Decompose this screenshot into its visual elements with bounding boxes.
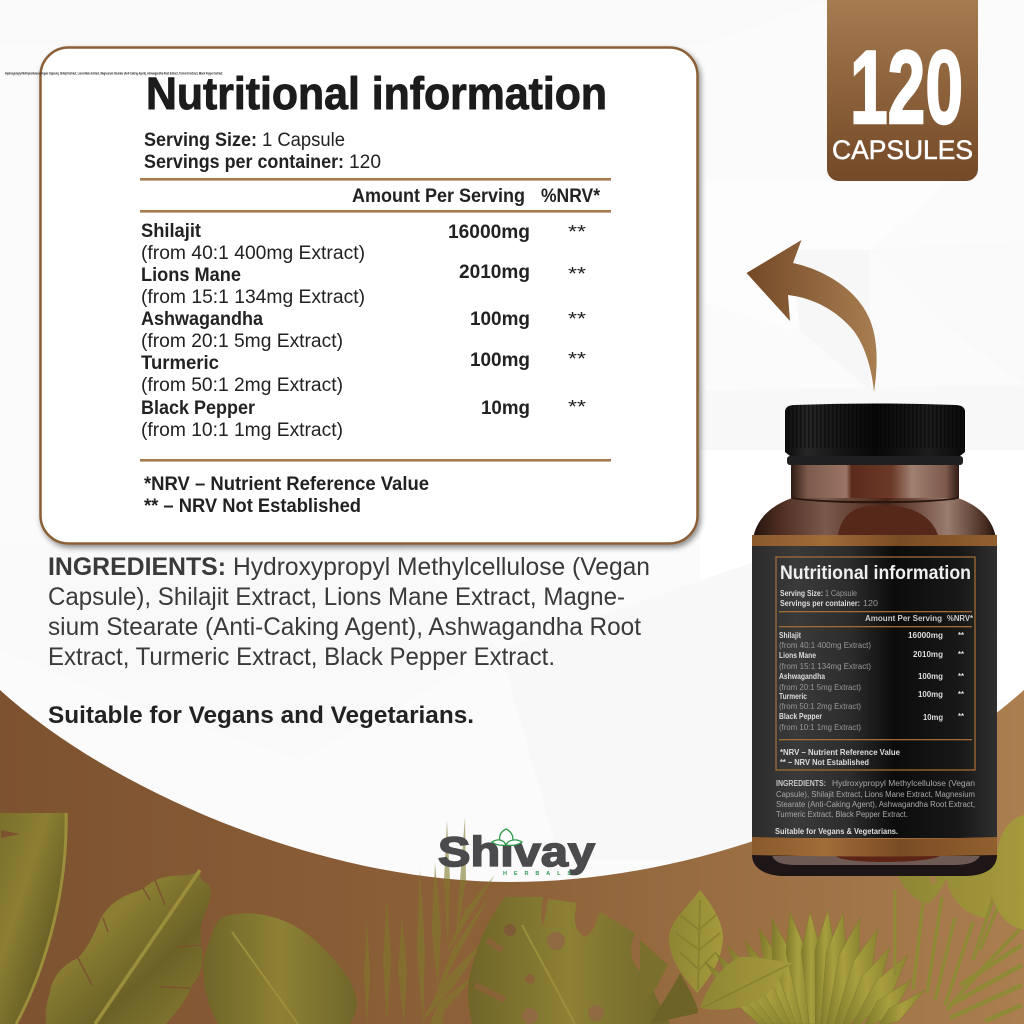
nutrient names and extracts: (from 15:1 134mg Extract)	[141, 287, 365, 308]
icon: logo leaves	[492, 829, 522, 845]
badge: 120 capsules: 120	[850, 30, 963, 146]
bottle shoulder	[752, 498, 997, 545]
label serving info: 1 Capsule	[825, 589, 857, 598]
nutrient names and extracts: Ashwagandha	[141, 309, 263, 330]
decorative grass blades near logo	[364, 817, 495, 1024]
NRV values: **	[568, 349, 586, 369]
label nutrients: (from 15:1 134mg Extract)	[779, 662, 871, 671]
ingredients paragraph: Hydroxypropyl Methylcellulose (Vegan	[233, 553, 650, 581]
NRV values: **	[568, 309, 586, 329]
decorative palm frond, right	[895, 887, 1022, 1021]
capsules visible through glass	[838, 506, 938, 535]
label serving info: Servings per container:	[780, 599, 860, 608]
label nutrients: (from 50:1 2mg Extract)	[779, 702, 861, 711]
nutrient names and extracts: (from 40:1 400mg Extract)	[141, 243, 365, 264]
nutrient names and extracts: Shilajit	[141, 221, 202, 242]
amounts per serving: 100mg	[470, 350, 530, 371]
label nutrients	[779, 631, 871, 732]
label amounts: **	[958, 672, 965, 681]
decorative leaves: far left banana leaf	[0, 813, 68, 1024]
label footnotes	[780, 748, 901, 767]
NRV values: **	[568, 397, 586, 417]
decorative leaves: lower olive cluster	[640, 890, 723, 1024]
tiny misplaced ingredients line: Hydroxypropyl Methylcellulose (Vegan Capsule), Shilajit Extract, Lions Mane Extract, Magnesium Stearate (Anti-Caking Agent), Ashwagandha Root Extract, Turmeric Extract, Black Pepper Extract.	[5, 72, 223, 76]
label nutrients: Shilajit	[779, 631, 801, 640]
label footnotes: ** – NRV Not Established	[780, 758, 869, 767]
amounts per serving: 10mg	[481, 398, 530, 419]
nutrient names and extracts: (from 10:1 1mg Extract)	[141, 420, 343, 441]
label heading: Nutritional information	[780, 563, 971, 584]
serving information: Servings per container:	[144, 152, 344, 173]
decorative leaves: banana leaf	[46, 870, 211, 1024]
ingredients paragraph: Capsule), Shilajit Extract, Lions Mane Extract, Magne-	[48, 583, 625, 611]
label amounts: 100mg	[918, 690, 943, 699]
footnotes: *NRV – Nutrient Reference Value	[144, 474, 429, 495]
nutrient names and extracts: Turmeric	[141, 353, 219, 374]
label amounts	[908, 631, 965, 722]
arrow pointing to the label	[746, 240, 877, 392]
nutrient names and extracts: Lions Mane	[141, 265, 241, 286]
label ingredients: Turmeric Extract, Black Pepper Extract.	[776, 810, 908, 819]
heading: nutritional information: Nutritional information	[146, 68, 607, 119]
amounts per serving	[448, 222, 530, 419]
bottle cap	[785, 404, 965, 465]
nutrient names and extracts	[141, 221, 365, 441]
label ingredients: INGREDIENTS:	[776, 779, 826, 788]
serving information	[144, 130, 381, 173]
label amounts: 16000mg	[908, 631, 943, 640]
bottle neck	[791, 456, 959, 504]
label ingredients: Stearate (Anti-Caking Agent), Ashwagandha Root Extract,	[776, 800, 975, 809]
label amounts: **	[958, 650, 965, 659]
serving information: 120	[349, 152, 381, 173]
label ingredients	[776, 779, 975, 819]
NRV values	[568, 222, 586, 417]
panel: nutritional information	[40, 48, 698, 544]
label serving info: 120	[863, 599, 879, 608]
amounts per serving: 2010mg	[459, 262, 530, 283]
table header: %NRV*	[541, 186, 601, 207]
nutrient names and extracts: (from 20:1 5mg Extract)	[141, 331, 343, 352]
label amounts: **	[958, 631, 965, 640]
label nutrients: Turmeric	[779, 692, 807, 701]
top band	[752, 535, 997, 546]
label table header: %NRV*	[947, 614, 974, 623]
ingredients paragraph	[48, 553, 650, 671]
label amounts: 2010mg	[913, 650, 943, 659]
label nutrients: Black Pepper	[779, 712, 822, 721]
label nutrients: (from 10:1 1mg Extract)	[779, 723, 861, 732]
bottle label body	[752, 546, 997, 838]
serving information: 1 Capsule	[262, 130, 345, 151]
label amounts: 100mg	[918, 672, 943, 681]
badge: 120 capsules: CAPSULES	[832, 135, 973, 165]
decorative leaves: monstera	[468, 897, 670, 1024]
amounts per serving: 100mg	[470, 309, 530, 330]
NRV values: **	[568, 222, 586, 242]
label serving info: Serving Size:	[780, 589, 823, 598]
NRV values: **	[568, 264, 586, 284]
serving information: Serving Size:	[144, 130, 257, 151]
label ingredients: Capsule), Shilajit Extract, Lions Mane Extract, Magnesium	[776, 790, 975, 799]
logo: Shivay Herbals: HERBALS	[503, 871, 571, 877]
decorative palm fan	[705, 910, 925, 1024]
footnotes	[144, 474, 429, 517]
bottom band	[752, 837, 997, 856]
bottle base	[752, 855, 997, 876]
nutrient names and extracts: (from 50:1 2mg Extract)	[141, 375, 343, 396]
label frame	[776, 557, 975, 770]
label footnotes: *NRV – Nutrient Reference Value	[780, 748, 901, 757]
label nutrients: Ashwagandha	[779, 672, 825, 681]
ingredients paragraph: Extract, Turmeric Extract, Black Pepper Extract.	[48, 643, 555, 671]
logo: Shivay Herbals: Shivay	[438, 828, 596, 875]
decorative leaves: round leaf	[203, 913, 357, 1024]
amounts per serving: 16000mg	[448, 222, 530, 243]
product bottle	[752, 404, 997, 876]
brown ground with curved edge	[0, 690, 1024, 1024]
ingredients paragraph: INGREDIENTS:	[48, 553, 226, 581]
badge: 120 capsules	[827, 0, 978, 181]
decorative monstera leaf, right of bottle	[897, 815, 1024, 930]
label ingredients: Hydroxypropyl Methylcellulose (Vegan	[832, 779, 975, 788]
label amounts: **	[958, 712, 965, 721]
ingredients paragraph: sium Stearate (Anti-Caking Agent), Ashwagandha Root	[48, 613, 641, 641]
label nutrients: Lions Mane	[779, 651, 816, 660]
label suitability: Suitable for Vegans & Vegetarians.	[775, 827, 898, 836]
label nutrients: (from 40:1 400mg Extract)	[779, 641, 871, 650]
label nutrients: (from 20:1 5mg Extract)	[779, 683, 861, 692]
nutrient names and extracts: Black Pepper	[141, 398, 256, 419]
decorative leaf: front lower leaf	[700, 957, 792, 1010]
table header: Amount Per Serving	[352, 186, 525, 207]
label amounts: 10mg	[923, 713, 943, 722]
label table header: Amount Per Serving	[865, 614, 942, 623]
footnotes: ** – NRV Not Established	[144, 496, 361, 517]
label serving info	[780, 589, 879, 608]
suitability statement: Suitable for Vegans and Vegetarians.	[48, 702, 474, 729]
label amounts: **	[958, 690, 965, 699]
